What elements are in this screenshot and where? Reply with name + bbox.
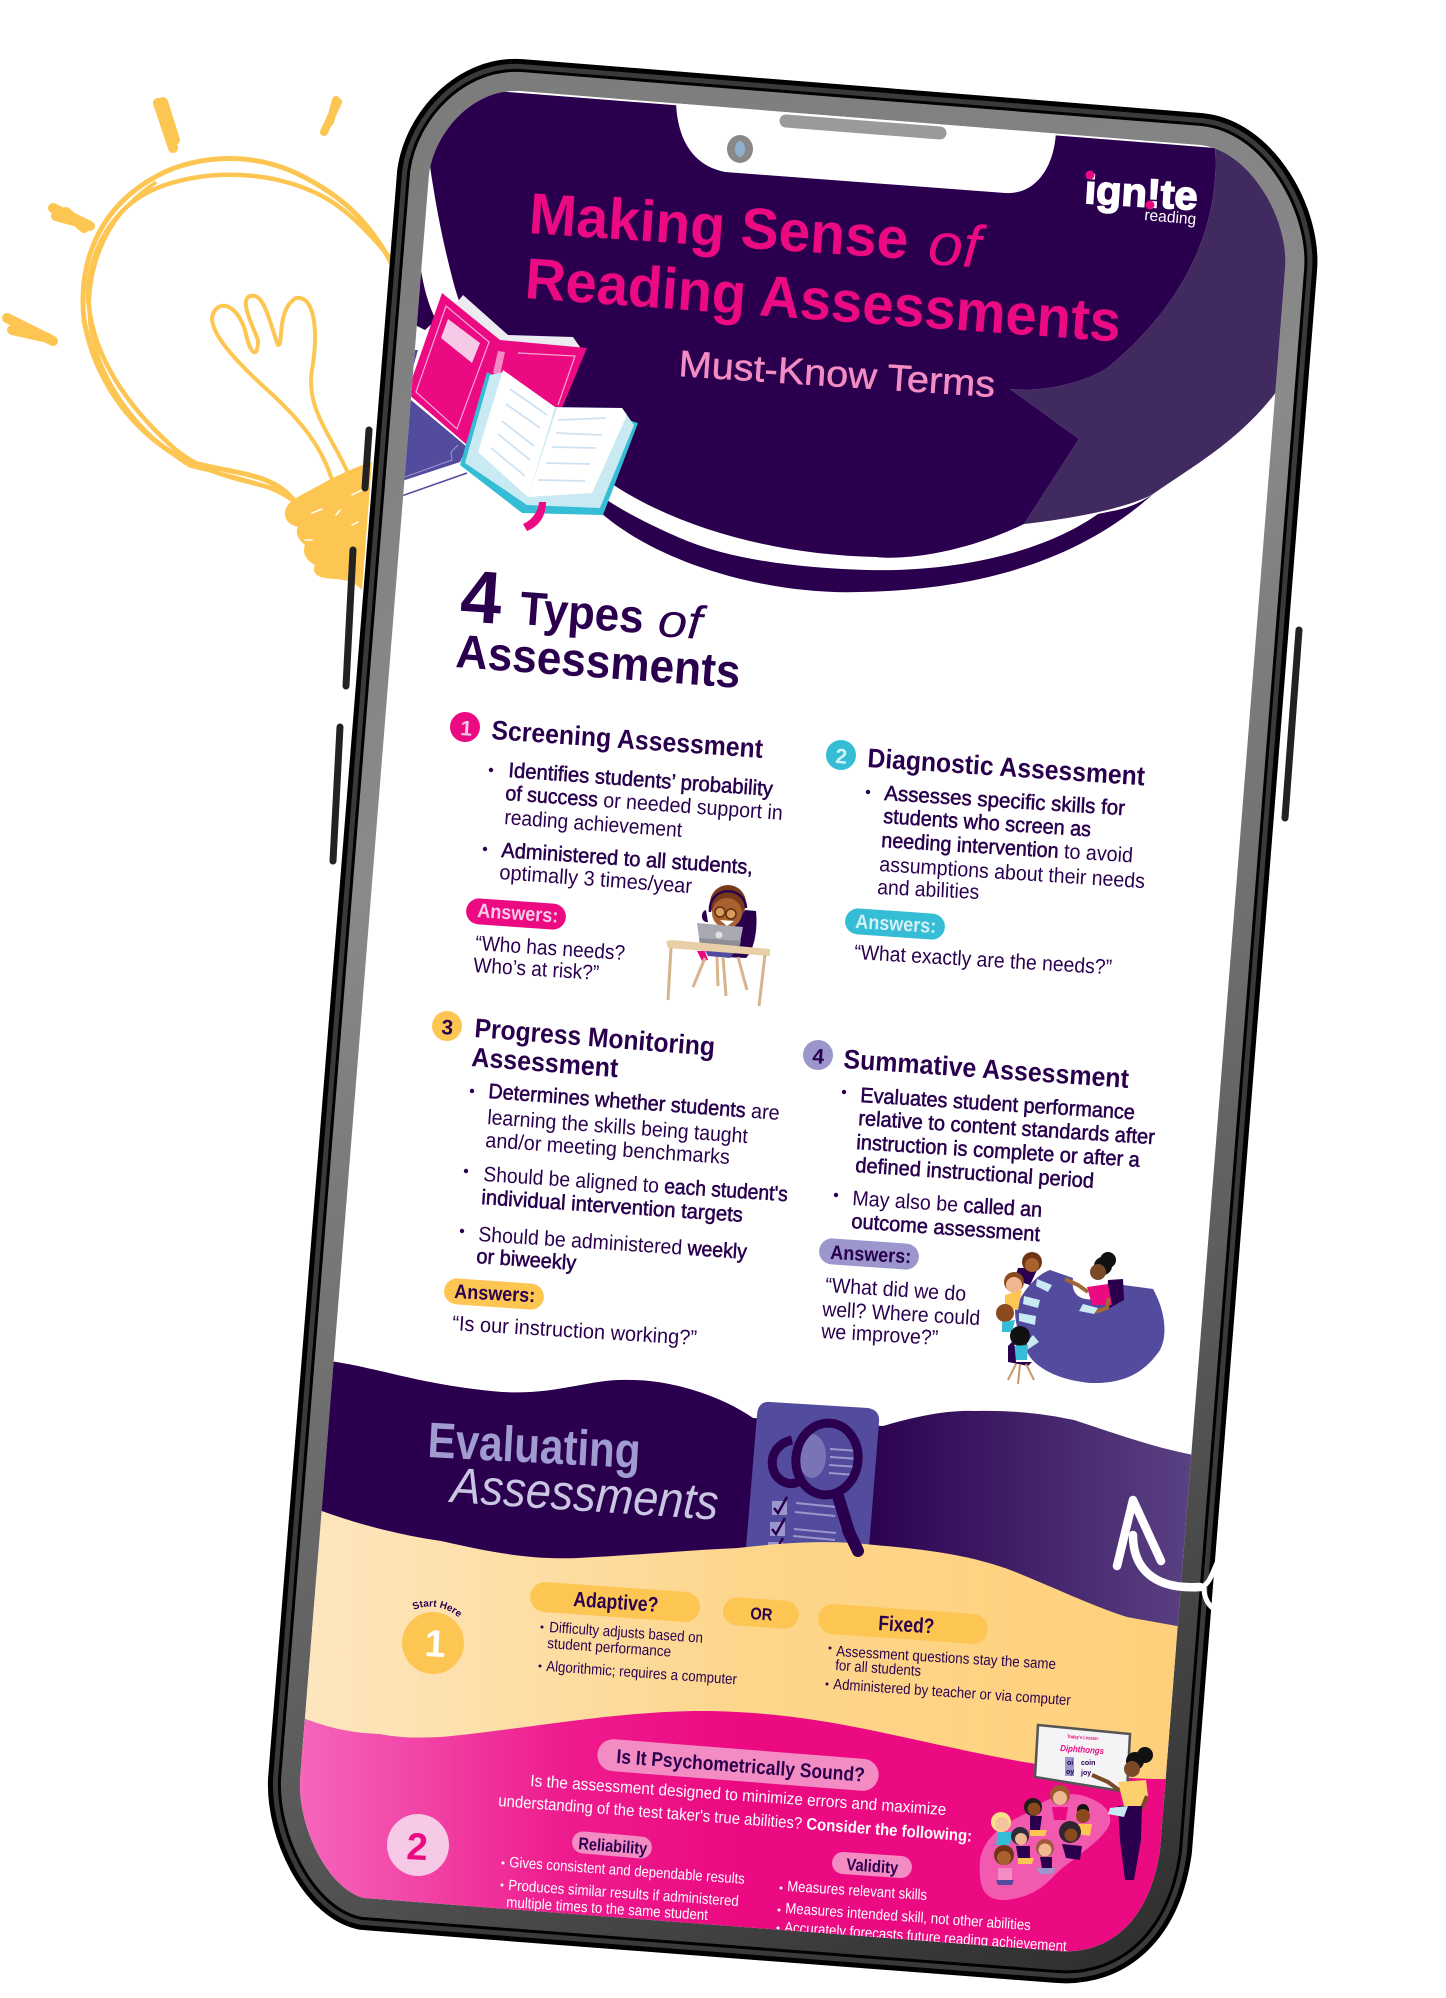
title: Reading Assessments — [523, 246, 1123, 355]
illustration: teacher, whiteboard and students — [980, 1725, 1153, 1900]
heading: evaluating assessments: Assessments — [447, 1457, 720, 1531]
icon: checklist with magnifier — [745, 1402, 879, 1560]
bullet text: screening — [483, 759, 784, 898]
phone screen content — [300, 92, 1286, 1952]
bullet text: screening: optimally 3 times/year — [499, 861, 693, 898]
heading: diagnostic: Diagnostic Assessment — [867, 743, 1146, 791]
bullet text: summative: outcome assessment — [851, 1210, 1041, 1246]
answer quote: diagnostic: “What exactly are the needs?” — [854, 941, 1113, 979]
answers pill: progress monitoring: Answers: — [454, 1281, 536, 1307]
answers pill: summative: Answers: — [830, 1242, 912, 1268]
title: Making Sense — [527, 181, 911, 272]
section band: evaluating assessments — [290, 1358, 1210, 1650]
pill: adaptive: Adaptive? — [573, 1588, 659, 1617]
header: dark purple dome — [420, 85, 1216, 558]
arrow crossing the phone edge — [1117, 1500, 1226, 1615]
answer quote: screening — [474, 936, 625, 980]
pill: adaptive — [529, 1581, 701, 1623]
validity column — [776, 1851, 1068, 1955]
whiteboard: coin — [1081, 1760, 1095, 1767]
panel: diagnostic assessment — [826, 740, 1146, 979]
bullets: fixed: for all students — [835, 1657, 922, 1680]
pill: is it psychometrically sound: Is It Psychometrically Sound? — [616, 1746, 866, 1787]
bullets: adaptive: student performance — [547, 1635, 672, 1661]
bullets: fixed: Administered by teacher or via computer — [833, 1676, 1071, 1709]
bullet text: diagnostic: needing intervention to avoid — [881, 829, 1134, 867]
number badge 4 — [803, 1040, 833, 1070]
section heading: 4 Types of Assessments: Types — [518, 581, 646, 643]
step 2 marker — [387, 1814, 449, 1876]
panel: progress monitoring assessment — [432, 1011, 789, 1350]
bullet text: progress monitoring: individual intervention targets — [481, 1186, 744, 1227]
section heading: 4 Types of Assessments: Assessments — [454, 624, 742, 698]
step 1 marker: start here: 1 — [424, 1623, 447, 1666]
number badge 4: 4 — [812, 1045, 825, 1069]
heading: summative: Summative Assessment — [843, 1044, 1130, 1094]
header: light purple backdrop — [1010, 148, 1300, 524]
bullet text: summative: Evaluates student performance — [860, 1084, 1136, 1124]
magnifier handle tip — [848, 1530, 858, 1551]
number badge 1 — [450, 712, 480, 742]
bullet text: summative — [834, 1084, 1156, 1246]
whiteboard: Today's Lesson: — [1067, 1734, 1099, 1742]
bullets: fixed: Assessment questions stay the same — [836, 1643, 1056, 1673]
bullets: validity: Measures intended skill, not other abilities — [785, 1900, 1031, 1934]
step 2 marker: 2 — [406, 1826, 429, 1869]
bullets: reliability — [500, 1854, 745, 1924]
whiteboard: joy — [1080, 1770, 1091, 1777]
bullets: reliability: Produces similar results if administered — [508, 1877, 739, 1910]
bullet text: screening: of success or needed support in — [505, 782, 784, 825]
bullet text: progress monitoring: and/or meeting benchmarks — [485, 1129, 731, 1169]
answer quote: summative — [822, 1278, 980, 1346]
title: of — [926, 210, 988, 281]
whiteboard — [1035, 1725, 1130, 1792]
bullet text: progress monitoring: Determines whether students are — [488, 1080, 781, 1125]
seating blob — [980, 1794, 1110, 1900]
number badge 3: 3 — [441, 1016, 454, 1040]
whiteboard: oy — [1066, 1769, 1074, 1776]
bullets: validity: Accurately forecasts future reading achievement — [784, 1919, 1068, 1955]
bullet text: diagnostic: Assesses specific skills for — [884, 782, 1126, 820]
icon: open book — [385, 293, 638, 531]
answer quote: summative: we improve?” — [820, 1320, 939, 1350]
section heading: 4 Types of Assessments: 4 — [458, 554, 505, 640]
bullet text: summative: instruction is complete or after a — [856, 1131, 1141, 1172]
logo: ignite reading: ign!te — [1083, 168, 1199, 219]
heading: progress monitoring — [472, 1018, 714, 1078]
heading: screening: Screening Assessment — [491, 715, 764, 764]
header: left sliver — [416, 270, 434, 330]
header: arc swoosh — [600, 494, 1153, 592]
section heading: 4 Types of Assessments — [456, 572, 738, 688]
answer quote: progress monitoring: “Is our instruction working?” — [452, 1312, 698, 1350]
bullet text: diagnostic: and abilities — [877, 876, 980, 904]
answer quote: screening: “Who has needs? — [475, 932, 626, 965]
illustration: teacher with students at table — [996, 1252, 1164, 1384]
bullet text: progress monitoring — [460, 1080, 789, 1275]
bullets: reliability: multiple times to the same student — [506, 1894, 709, 1924]
pill: reliability: Reliability — [578, 1834, 648, 1858]
bullet text: screening: reading achievement — [504, 806, 683, 842]
band: yellow section — [290, 1498, 1210, 1800]
band: pink section — [285, 1710, 1180, 1960]
lightbulb doodle — [7, 100, 395, 590]
bullet text: summative: May also be called an — [852, 1187, 1043, 1222]
answer quote: summative: “What did we do — [825, 1274, 967, 1306]
illustration: student at laptop — [666, 885, 770, 1006]
section heading: 4 Types of Assessments: of — [656, 593, 709, 649]
number badge 2 — [826, 740, 856, 770]
heading: progress monitoring: Assessment — [471, 1042, 619, 1083]
answers pill: diagnostic: Answers: — [855, 911, 937, 938]
panel: screening assessment — [450, 712, 784, 1006]
bullet text: summative: defined instructional period — [855, 1154, 1095, 1193]
step 1 marker: start here: Start Here — [412, 1600, 461, 1616]
number badge 1: 1 — [460, 717, 473, 741]
bullets: validity — [776, 1878, 1068, 1955]
adaptive option — [529, 1581, 737, 1688]
bullets: adaptive: Difficulty adjusts based on — [549, 1619, 704, 1647]
students — [991, 1785, 1092, 1885]
step 1 marker: start here — [402, 1600, 464, 1674]
phone frame — [300, 91, 1285, 1951]
reliability column — [500, 1831, 745, 1924]
bullet text: summative: relative to content standards after — [858, 1107, 1156, 1149]
bullets: fixed — [826, 1643, 1071, 1709]
answer quote: summative: well? Where could — [821, 1298, 981, 1330]
heading: progress monitoring: Progress Monitoring — [474, 1013, 716, 1062]
number badge 2: 2 — [835, 745, 848, 769]
number badge 3 — [432, 1011, 462, 1041]
intro text: psychometrics: understanding of the test taker's true abilities? Consider the following: — [498, 1792, 973, 1846]
bullet text: diagnostic: students who screen as — [883, 805, 1092, 841]
title — [528, 194, 1118, 342]
subtitle: Must-Know Terms — [677, 343, 996, 405]
pill: validity — [831, 1851, 913, 1879]
whiteboard: oi — [1067, 1760, 1073, 1767]
pill: or — [722, 1596, 800, 1630]
teacher — [1092, 1747, 1153, 1880]
bullet text: progress monitoring: learning the skills being taught — [487, 1106, 749, 1148]
bullets: validity: Measures relevant skills — [787, 1878, 928, 1904]
answers pill: screening: Answers: — [477, 900, 559, 928]
bullet text: progress monitoring: Should be aligned to each student's — [483, 1163, 789, 1206]
pill: validity: Validity — [846, 1855, 899, 1878]
answer quote: screening: Who’s at risk?” — [473, 954, 600, 985]
bullets: reliability: Gives consistent and dependable results — [509, 1854, 745, 1888]
heading: evaluating assessments: Evaluating — [426, 1412, 642, 1479]
pill: fixed — [817, 1603, 989, 1645]
pill: fixed: Fixed? — [878, 1612, 935, 1638]
panel: summative assessment — [803, 1040, 1164, 1384]
bullet text: screening: Identifies students’ probability — [508, 759, 774, 801]
whiteboard: Diphthongs — [1060, 1743, 1104, 1756]
bullet text: screening: Administered to all students, — [501, 839, 754, 879]
intro text: psychometrics: Is the assessment designed to minimize errors and maximize — [530, 1772, 947, 1819]
heading: evaluating assessments — [430, 1422, 718, 1520]
pill: or: OR — [750, 1604, 773, 1625]
bullets: adaptive — [538, 1619, 737, 1688]
bullet text: diagnostic: assumptions about their needs — [879, 853, 1146, 893]
bullet text: progress monitoring: Should be administered weekly — [478, 1223, 748, 1264]
bullet text: progress monitoring: or biweekly — [476, 1245, 577, 1275]
fixed option — [817, 1603, 1071, 1709]
bullets: adaptive: Algorithmic; requires a computer — [546, 1658, 737, 1688]
phone side buttons — [333, 430, 1299, 861]
bullet text: diagnostic — [866, 782, 1146, 904]
notch with speaker and camera — [676, 98, 1056, 193]
intro text: psychometrics — [498, 1772, 973, 1846]
logo: ignite reading: reading — [1144, 207, 1197, 229]
